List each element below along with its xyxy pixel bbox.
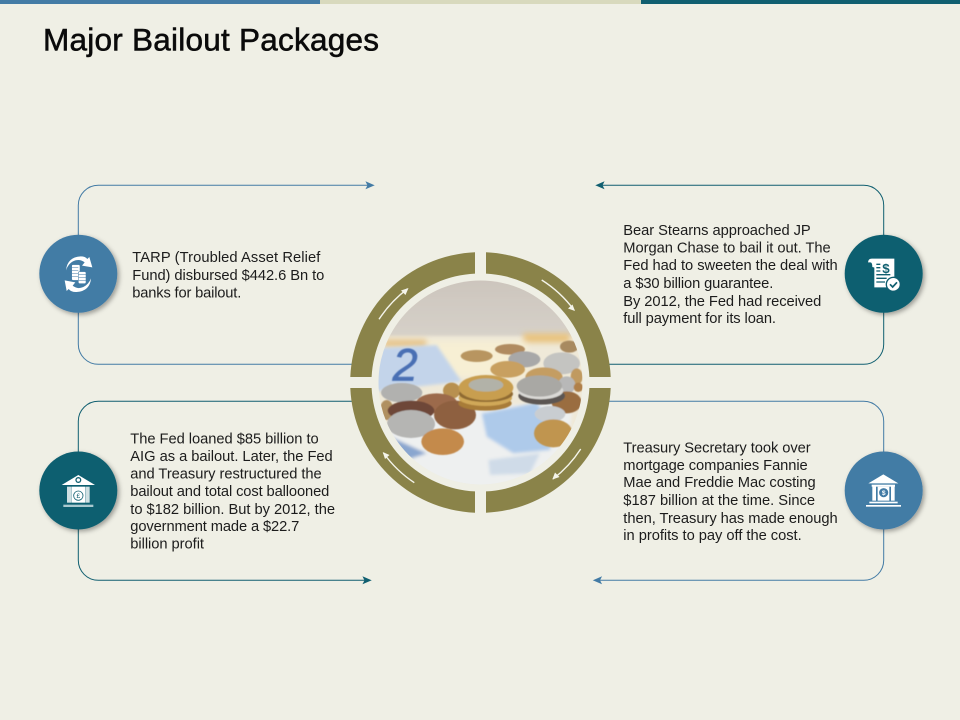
text: AIG: The Fed loaned $85 billion to xyxy=(130,431,319,447)
text: Bear Stearns: Fed had to sweeten the deal with xyxy=(623,258,838,274)
text: Treasury: $187 billion at the time. Since xyxy=(623,493,815,509)
text: Treasury: then, Treasury has made enough xyxy=(623,511,838,527)
text: Bear Stearns: By 2012, the Fed had received xyxy=(623,294,821,310)
text: TARP xyxy=(132,250,324,302)
text: Treasury: Mae and Freddie Mac costing xyxy=(623,475,816,491)
photo: coins on banknotes xyxy=(378,280,582,484)
badge: TARP coin cycle icon xyxy=(39,235,117,313)
text: AIG: government made a $22.7 xyxy=(130,519,299,535)
badge: Bear Stearns receipt icon xyxy=(845,235,923,313)
text: TARP: Fund) disbursed $442.6 Bn to xyxy=(132,268,324,284)
coins: 2 xyxy=(392,340,418,391)
text: Bear Stearns: Bear Stearns approached JP xyxy=(623,223,811,239)
arrow connector: top right xyxy=(596,182,884,364)
centre ring: four olive segments xyxy=(350,252,611,513)
badge: AIG pound bank icon xyxy=(39,452,117,530)
text: Treasury xyxy=(623,440,838,544)
text: Bear Stearns: Morgan Chase to bail it out. The xyxy=(623,241,831,257)
arrow connector: bottom right xyxy=(594,401,884,583)
icon: receipt with dollar and check mark: $ xyxy=(882,261,890,276)
text: Treasury: in profits to pay off the cost. xyxy=(623,528,802,544)
icon: coins with cycle arrows xyxy=(65,256,92,292)
badge: Treasury dollar bank icon xyxy=(845,452,923,530)
text: Bear Stearns xyxy=(623,223,838,327)
ring arrows: clockwise white arrows xyxy=(379,280,581,483)
text: AIG: bailout and total cost ballooned xyxy=(130,484,329,500)
icon: bank with pound sign: £ xyxy=(76,493,80,500)
text: AIG: to $182 billion. But by 2012, the xyxy=(130,502,335,518)
text: AIG: AIG as a bailout. Later, the Fed xyxy=(130,449,333,465)
text: TARP: TARP (Troubled Asset Relief xyxy=(132,250,321,266)
coins xyxy=(380,340,583,455)
text: AIG xyxy=(130,431,335,553)
icon: bank with dollar sign: $ xyxy=(882,490,886,497)
text: AIG: and Treasury restructured the xyxy=(130,466,322,482)
arrow connector: bottom left xyxy=(78,401,371,583)
title: Major Bailout Packages xyxy=(43,22,379,58)
text: Treasury: Treasury Secretary took over xyxy=(623,440,811,456)
text: Bear Stearns: a $30 billion guarantee. xyxy=(623,276,773,292)
arrow connector: top left xyxy=(78,182,374,364)
text: Bear Stearns: full payment for its loan. xyxy=(623,311,776,327)
text: AIG: billion profit xyxy=(130,537,204,553)
top colour band xyxy=(0,0,960,4)
text: Treasury: mortgage companies Fannie xyxy=(623,458,808,474)
text: TARP: banks for bailout. xyxy=(132,286,241,302)
